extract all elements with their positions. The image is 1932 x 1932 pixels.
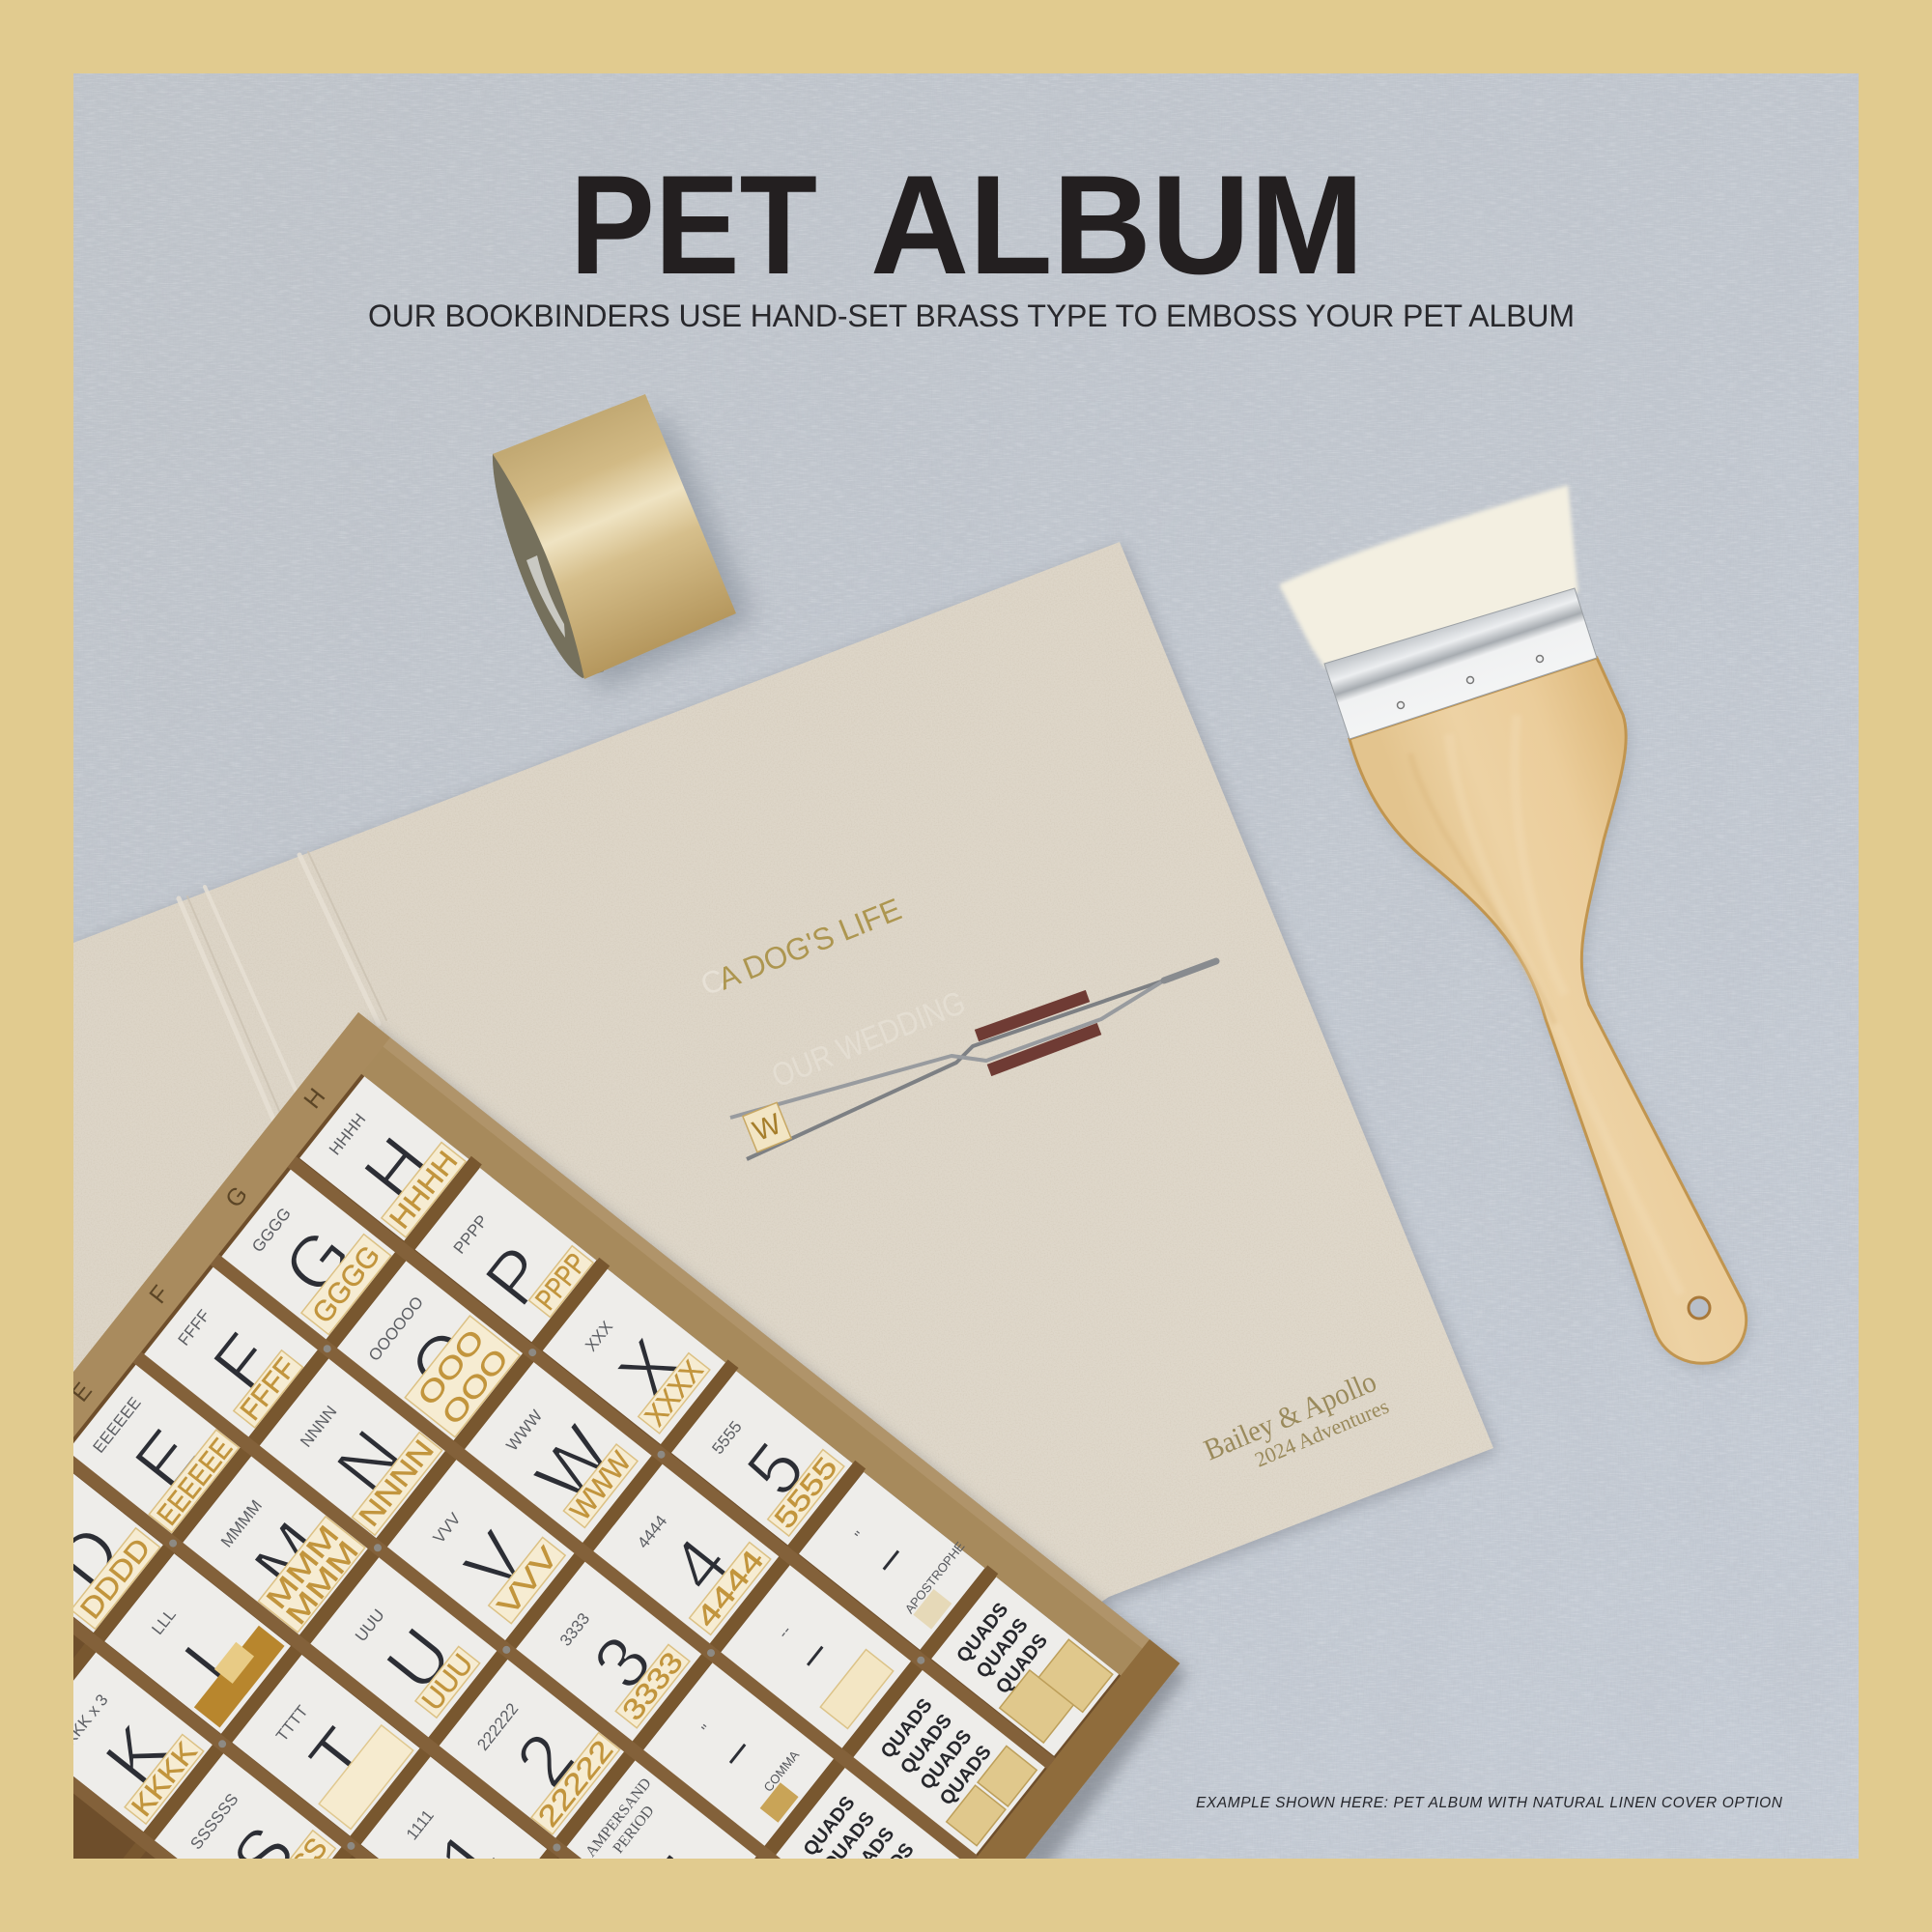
- cell O: O: [394, 1314, 494, 1409]
- cell H: HHHH: [326, 1110, 369, 1158]
- cell L: L: [168, 1614, 258, 1697]
- cell E: E: [119, 1414, 213, 1504]
- cell K: KKKK: [126, 1736, 204, 1823]
- cell K: KKK x 3: [61, 1690, 112, 1748]
- gold stamped title: A DOG'S LIFE: [713, 892, 906, 996]
- cell T: T: [294, 1714, 386, 1800]
- cell quads middle: QUADS: [936, 1742, 996, 1809]
- spine creases: [179, 852, 386, 1135]
- cell O: OOOOOO: [365, 1293, 427, 1365]
- cell O: [337, 1261, 523, 1440]
- cell S: SSSSSS: [186, 1790, 242, 1853]
- cell M: [183, 1456, 370, 1637]
- cell 3: [516, 1561, 701, 1742]
- title: ALBUM: [870, 146, 1364, 303]
- cell X: X: [602, 1324, 697, 1413]
- cell 5: 5555: [708, 1418, 746, 1458]
- cell H: H: [348, 1122, 445, 1215]
- cell 4: 4: [655, 1523, 745, 1606]
- faint blind deboss before title: C: [696, 961, 729, 1002]
- cell T: TTTT: [272, 1702, 312, 1745]
- frame column letters: E: [67, 1378, 98, 1407]
- cell quads bottom: QUADS: [800, 1792, 860, 1861]
- cell hyphen: [721, 1565, 911, 1748]
- cell comma: [643, 1662, 834, 1846]
- cell D: DDDD: [74, 1533, 157, 1625]
- cell 1: 1: [423, 1816, 513, 1899]
- cell P: PPPP: [529, 1248, 593, 1316]
- cell S: [155, 1752, 342, 1930]
- cell O: OOO: [412, 1323, 491, 1411]
- cell quads bottom: QUADS: [838, 1824, 898, 1891]
- cell P: PPPP: [450, 1211, 492, 1258]
- cell ampersand and period: .: [634, 1828, 685, 1872]
- cell G: [221, 1169, 395, 1340]
- tray dividers: [0, 1156, 1055, 1918]
- cell quads bottom: QUADS: [819, 1808, 879, 1876]
- cell ampersand and period: AMPERSAND: [582, 1776, 655, 1861]
- cell quads bottom: [776, 1768, 968, 1928]
- cell S: S: [216, 1811, 311, 1900]
- cell 1: 1111: [403, 1806, 438, 1843]
- cell 2: 22222: [532, 1735, 619, 1833]
- cell quads middle: [853, 1670, 1045, 1855]
- cell D: D: [40, 1511, 137, 1604]
- white bristles: [1281, 487, 1577, 667]
- cell 4: [593, 1463, 780, 1644]
- cell V: VVV: [492, 1541, 564, 1622]
- cell V: VVV: [430, 1509, 465, 1547]
- cell E: EEEEEE: [90, 1394, 145, 1457]
- cell quads top: QUADS: [973, 1614, 1033, 1683]
- cell O: OOO: [437, 1343, 515, 1431]
- cell hyphen: --: [774, 1622, 795, 1642]
- cell quads middle: QUADS: [916, 1726, 977, 1794]
- cell quads middle: QUADS: [877, 1694, 937, 1763]
- cell L: LLL: [148, 1605, 180, 1638]
- cell hyphen: –: [786, 1630, 838, 1678]
- cell 5: 5: [731, 1428, 821, 1511]
- cell W: WWW: [564, 1445, 638, 1526]
- cell G: GGGG: [248, 1205, 295, 1256]
- caption: EXAMPLE SHOWN HERE: PET ALBUM WITH NATURAL LINEN COVER OPTION: [1196, 1795, 1783, 1811]
- cell 4: 4444: [634, 1512, 670, 1552]
- cell N: N: [321, 1415, 418, 1508]
- cell L: [104, 1553, 291, 1734]
- metal ferrule: [1324, 588, 1597, 739]
- cell 4: 4444: [691, 1544, 771, 1634]
- linen album cover: [73, 542, 1499, 1607]
- wooden handle: [1350, 658, 1747, 1363]
- cell 5: 5555: [769, 1451, 844, 1535]
- cell M: MMMM: [217, 1496, 266, 1550]
- cell 3: 3333: [556, 1609, 593, 1650]
- cell 2: [439, 1659, 625, 1839]
- cell apostrophe: [799, 1468, 988, 1650]
- gold stamped names: Bailey & Apollo: [1199, 1364, 1381, 1466]
- cell F: [144, 1266, 320, 1438]
- cell U: UUU: [416, 1648, 480, 1717]
- cell N: NNNN: [297, 1403, 341, 1451]
- frame column letters: F: [144, 1281, 175, 1309]
- cell P: [415, 1168, 598, 1343]
- cell N: [259, 1358, 445, 1539]
- cell M: MMM: [280, 1535, 365, 1631]
- cell T: [232, 1655, 420, 1836]
- cell V: V: [449, 1518, 544, 1607]
- cell D: DDDD: [17, 1499, 61, 1548]
- gold foil tape roll: [493, 394, 753, 691]
- cell G: GGGG: [306, 1240, 386, 1329]
- wooden type case tray: [0, 1012, 1187, 1930]
- subtitle: OUR BOOKBINDERS USE HAND-SET BRASS TYPE TO EMBOSS YOUR PET ALBUM: [368, 298, 1575, 333]
- cell H: [299, 1076, 469, 1241]
- cell F: F: [197, 1319, 290, 1405]
- title: PET: [570, 146, 817, 303]
- cell ampersand and period: PERIOD: [611, 1803, 658, 1857]
- blind embossed ghost text: OUR WEDDING: [767, 984, 971, 1094]
- cell quads top: [931, 1577, 1119, 1756]
- cell V: [387, 1460, 575, 1640]
- cell S: SSSSS: [251, 1833, 334, 1924]
- cell W: WWW: [502, 1406, 546, 1455]
- cell comma: –: [709, 1727, 761, 1776]
- cell N: NNNN: [353, 1435, 440, 1533]
- cell U: U: [371, 1613, 468, 1706]
- cell M: MMM: [261, 1520, 346, 1615]
- cell E: EEEEEE: [152, 1433, 239, 1531]
- gold stamped names: 2024 Adventures: [1251, 1394, 1392, 1472]
- cell quads middle: QUADS: [896, 1711, 956, 1778]
- hake glue brush: [1281, 487, 1749, 1368]
- title: [570, 146, 1364, 303]
- cell F: FFFF: [235, 1352, 302, 1427]
- cell H: HHHH: [384, 1146, 464, 1235]
- cell X: XXXX: [639, 1355, 710, 1433]
- cell U: [310, 1556, 497, 1738]
- cell 2: 2: [500, 1719, 590, 1802]
- frame column letters: G: [220, 1181, 253, 1212]
- cell apostrophe: ": [851, 1528, 869, 1544]
- cell 1: [361, 1756, 547, 1928]
- tweezers holding brass W: [730, 961, 1216, 1159]
- cell quads bottom: QUADS: [859, 1839, 919, 1907]
- handle hole: [1689, 1297, 1710, 1319]
- cell quads top: QUADS: [952, 1599, 1012, 1667]
- cell K: K: [90, 1711, 185, 1800]
- cell D: [0, 1462, 163, 1633]
- frame column letters: H: [298, 1083, 330, 1114]
- cell 3: 3: [578, 1621, 668, 1704]
- cell K: [27, 1652, 213, 1832]
- tray frame: [0, 1012, 1179, 1922]
- cell W: [465, 1362, 652, 1543]
- tweezers holding brass W: W: [749, 1108, 786, 1148]
- cell 3: 3333: [616, 1646, 690, 1726]
- cell 5: [671, 1371, 853, 1545]
- cell 2: 222222: [473, 1699, 522, 1754]
- cell F: FFFF: [175, 1306, 213, 1350]
- cell comma: ": [698, 1721, 716, 1738]
- cell quads top: QUADS: [992, 1631, 1052, 1698]
- cell E: [67, 1364, 242, 1536]
- cell ampersand and period: [566, 1760, 757, 1927]
- cell apostrophe: –: [863, 1534, 915, 1582]
- frame column letters: [67, 1083, 330, 1407]
- cell X: [543, 1269, 725, 1444]
- cell apostrophe: APOSTROPHE: [902, 1539, 968, 1616]
- cell U: UUU: [352, 1605, 388, 1645]
- cell G: G: [268, 1214, 368, 1310]
- cell M: M: [239, 1507, 340, 1606]
- cell X: XXX: [582, 1318, 616, 1355]
- cell W: W: [520, 1412, 628, 1518]
- cell P: P: [469, 1232, 564, 1321]
- cell comma: COMMA: [761, 1747, 802, 1795]
